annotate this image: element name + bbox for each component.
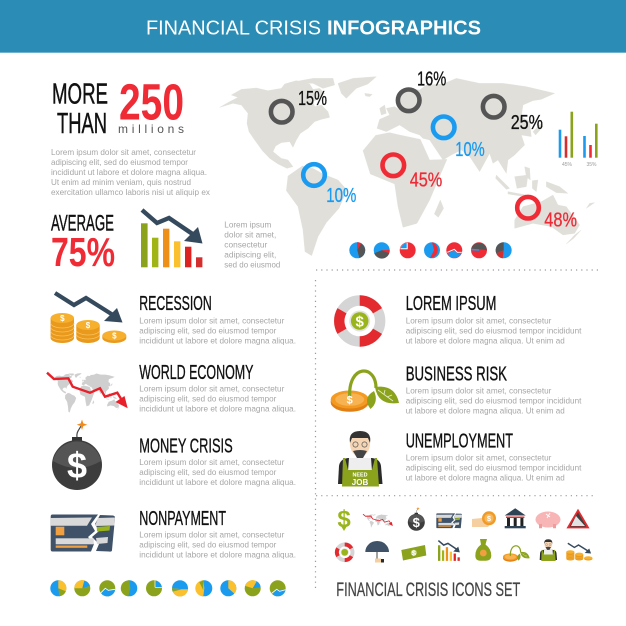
text block: intro [51,147,211,197]
panel: more than 250 millions: MORE [52,78,108,110]
ring: middle east 10%: 10% [455,139,485,161]
text block: intro: incididunt ut labore et dolore magna aliqua. [51,167,207,177]
lifebuoy icon: $ [356,314,365,330]
world economy icon [47,373,128,413]
ring: africa 45% [382,154,442,192]
icon: bars and arrow small [438,541,460,561]
panel: average 75%: AVERAGE [51,211,114,236]
icon: dollar: $ [337,506,351,533]
ring: europe 16% [398,68,446,111]
world map [220,77,595,256]
icon: card small [436,513,462,528]
heading and text: business risk: Lorem ipsum dolor sit amet, consectetur [406,385,552,395]
icon: lifebuoy small [337,545,352,560]
ring: south america 10%: 10% [326,185,356,207]
ring: north america 15%: 15% [298,88,327,110]
panel: more than 250 millions: 250 [119,74,184,130]
icon: hand with coin [472,511,496,527]
heading and text: recession: incididunt ut labore et dolore magna aliqua. [139,335,296,345]
panel: average 75%: 75% [51,229,115,275]
unemployed man icon [338,431,382,487]
heading and text: business risk: adipiscing elit, sed do eiusmod tempor incididunt [406,395,582,405]
panel: more than 250 millions: millions [118,122,184,136]
icon: bomb small: $ [413,515,421,530]
heading and text: recession: Lorem ipsum dolor sit amet, consectetur [139,315,284,325]
heading and text: money crisis: adipiscing elit, sed do eiusmod tempor [139,467,276,477]
heading and text: money crisis: Lorem ipsum dolor sit amet, consectetur [139,457,284,467]
coin plant icon [331,371,399,412]
ring: africa 45%: 45% [410,170,442,192]
coin plant icon: $ [347,394,353,406]
ring: asia 25% [483,96,543,134]
ring: south america 10% [303,164,356,207]
bar chart: falling bars with arrow [141,210,202,267]
mini bar chart [559,112,598,168]
heading and text: unemployment [406,431,582,482]
heading and text: world economy: Lorem ipsum dolor sit amet, consectetur [139,384,284,394]
icon: hand with coin: $ [487,514,492,523]
icon set caption: FINANCIAL CRISIS ICONS SET [336,579,520,601]
text block: intro: Lorem ipsum dolor sit amet, consectetur [51,147,196,157]
heading and text: money crisis: incididunt ut labore et dolore magna aliqua. [139,477,296,487]
ring: europe 16%: 16% [417,68,446,90]
recession icon: $ [60,314,65,323]
unemployed man icon: NEED [353,472,368,478]
ring: north america 15% [271,88,327,122]
bomb icon [52,420,102,490]
title: INFOGRAPHICS [327,16,481,40]
heading and text: lorem ipsum: LOREM IPSUM [406,293,496,315]
ring: australia 48%: 48% [544,209,577,231]
text block: side note: dolor sit amet, [224,230,276,240]
icon: piggy bank [536,512,560,528]
heading and text: unemployment: UNEMPLOYMENT [406,431,513,453]
heading and text: lorem ipsum: ut labore et dolore magna aliqua. Ut enim ad [406,335,565,345]
title: FINANCIAL CRISIS [146,16,321,40]
pie row: bottom left [50,580,286,597]
recession icon [51,293,126,343]
heading and text: business risk: ut labore et dolore magna aliqua. Ut enim ad [406,405,565,415]
ring: australia 48% [517,197,577,231]
heading and text: world economy [139,362,296,414]
heading and text: money crisis [139,435,296,487]
heading and text: business risk [406,364,582,415]
unemployed man icon: JOB [352,478,368,487]
pie row: map [349,242,512,259]
icon set [337,506,592,562]
recession icon: $ [112,332,117,340]
text block: side note: consectetur [224,240,267,250]
heading and text: nonpayment: adipiscing elit, sed do eiusmod tempor [139,540,276,550]
panel: more than 250 millions: THAN [57,108,107,140]
icon: money bag [475,539,491,561]
heading and text: nonpayment: incididunt ut labore et dolore magna aliqua. [139,550,296,560]
icon: cash [401,545,426,560]
text block: side note [224,220,280,270]
text block: intro: exercitation ullamco laboris nisi ut aliquip ex [51,187,211,197]
heading and text: world economy: WORLD ECONOMY [139,362,254,384]
credit card icon [51,514,115,552]
icon: recession small [566,543,592,561]
icon: man small [540,539,557,561]
icon: cash: $ [412,548,417,558]
heading and text: unemployment: ut labore et dolore magna aliqua. Ut enim ad [406,472,565,482]
mini bar chart: 35% [586,162,597,168]
panel: more than 250 millions [52,74,184,140]
heading and text: nonpayment: NONPAYMENT [139,508,226,530]
text block: side note: Lorem ipsum [224,220,271,230]
lifebuoy icon [339,300,380,342]
text block: side note: adipiscing elit, [224,250,276,260]
recession icon: $ [86,321,91,330]
heading and text: lorem ipsum: adipiscing elit, sed do eiusmod tempor incididunt [406,325,582,335]
heading and text: world economy: adipiscing elit, sed do eiusmod tempor [139,394,276,404]
mini bar chart: 45% [562,162,573,168]
heading and text: lorem ipsum: Lorem ipsum dolor sit amet, consectetur [406,315,552,325]
heading and text: lorem ipsum [406,293,582,345]
ring: middle east 10% [433,116,485,161]
header banner [0,0,626,53]
heading and text: business risk: BUSINESS RISK [406,364,507,386]
icon: umbrella [365,541,389,562]
ring: asia 25%: 25% [511,112,543,134]
heading and text: unemployment: Lorem ipsum dolor sit amet, consectetur [406,452,552,462]
heading and text: nonpayment [139,508,296,560]
panel: average 75% [51,211,115,275]
text block: side note: sed do eiusmod [224,260,280,270]
heading and text: money crisis: MONEY CRISIS [139,435,233,457]
bomb icon: $ [67,445,87,486]
icon: coin plant small [503,546,530,562]
heading and text: recession: RECESSION [139,293,212,315]
heading and text: recession: adipiscing elit, sed do eiusmod tempor [139,325,276,335]
icon: warning triangle [568,510,588,528]
heading and text: recession [139,293,296,345]
icon: bank [505,508,526,528]
icon: bomb small [408,507,425,531]
heading and text: unemployment: adipiscing elit, sed do eiusmod tempor incididunt [406,462,582,472]
heading and text: world economy: incididunt ut labore et dolore magna aliqua. [139,404,296,414]
icon: world economy small [363,514,393,527]
text block: intro: adipiscing elit, sed do eiusmod tempor [51,157,188,167]
text block: intro: Ut enim ad minim veniam, quis nostrud [51,177,191,187]
heading and text: nonpayment: Lorem ipsum dolor sit amet, consectetur [139,530,284,540]
